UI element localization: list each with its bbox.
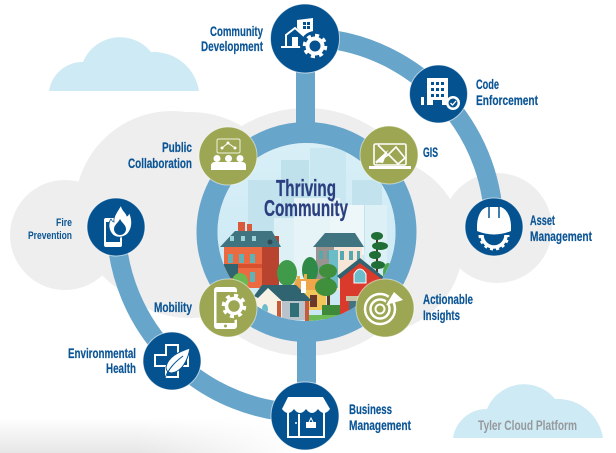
label: Community Development: Development bbox=[201, 39, 263, 54]
central ring bbox=[207, 132, 406, 332]
connector: lower left arc bbox=[116, 227, 305, 413]
label: Public Collaboration: Public bbox=[162, 140, 192, 155]
label: Fire Prevention: Prevention bbox=[28, 230, 72, 242]
node: GIS bbox=[360, 126, 418, 184]
node: Code Enforcement bbox=[410, 65, 468, 123]
label: Public Collaboration: Collaboration bbox=[128, 156, 192, 171]
title: Thriving bbox=[276, 175, 336, 201]
icon: audience and screen bbox=[211, 139, 246, 170]
label: Fire Prevention bbox=[28, 217, 72, 242]
cloud: large gray background bbox=[10, 108, 552, 356]
label: Actionable Insights bbox=[423, 292, 473, 323]
icon: hard hat and gear bbox=[477, 207, 511, 249]
skyline bbox=[248, 148, 387, 288]
connector: vertical stems bbox=[296, 60, 316, 395]
bottom shadow fade bbox=[0, 418, 300, 453]
icon: storefront bbox=[282, 397, 330, 437]
connector: upper right arc bbox=[335, 40, 494, 227]
cloud: Tyler Cloud Platform bbox=[453, 384, 603, 438]
label: Environmental Health: Environmental bbox=[68, 346, 136, 361]
label: Environmental Health bbox=[68, 346, 136, 376]
node: Business Management bbox=[271, 382, 339, 450]
title: Community bbox=[264, 195, 348, 221]
house: tudor front bbox=[254, 281, 338, 321]
node: Environmental Health bbox=[143, 332, 201, 390]
icon: phone with gear bbox=[214, 287, 248, 329]
node: Community Development bbox=[270, 4, 340, 73]
node: Fire Prevention bbox=[87, 198, 145, 256]
trees bbox=[232, 232, 390, 286]
house: back right bbox=[313, 233, 364, 292]
label: Actionable Insights: Insights bbox=[423, 308, 460, 323]
label: Community Development: Community bbox=[210, 24, 263, 39]
label: Business Management: Business bbox=[349, 402, 392, 417]
icon: phone and flame bbox=[104, 205, 132, 247]
icon: house, building and gear bbox=[281, 18, 330, 61]
node: Public Collaboration bbox=[199, 127, 257, 185]
label: Fire Prevention: Fire bbox=[56, 217, 72, 229]
title bbox=[264, 175, 348, 221]
central city scene bbox=[217, 143, 396, 323]
label: Actionable Insights: Actionable bbox=[423, 292, 473, 307]
label: Public Collaboration bbox=[128, 140, 192, 171]
node: Actionable Insights bbox=[356, 279, 414, 337]
label: Code Enforcement: Enforcement bbox=[476, 93, 538, 108]
label: Mobility: Mobility bbox=[154, 300, 192, 315]
cloud: top-left light blue bbox=[49, 37, 199, 91]
label: Asset Management bbox=[530, 213, 592, 244]
label: Code Enforcement bbox=[476, 77, 538, 108]
tree: middle bbox=[315, 264, 344, 319]
label: Business Management: Management bbox=[349, 418, 411, 433]
house: red right bbox=[337, 258, 384, 314]
label: Community Development bbox=[201, 24, 263, 54]
node: Mobility bbox=[199, 279, 257, 337]
node: Asset Management bbox=[465, 198, 523, 256]
icon: medical cross and leaf bbox=[155, 345, 190, 378]
icon: map on monitor bbox=[369, 144, 411, 169]
label: Code Enforcement: Code bbox=[476, 77, 499, 92]
label: Asset Management: Asset bbox=[530, 213, 555, 228]
icon: building with badge bbox=[421, 78, 460, 110]
label: Asset Management: Management bbox=[530, 229, 592, 244]
label: Business Management bbox=[349, 402, 411, 433]
house: orange middle bbox=[294, 274, 326, 310]
label: Environmental Health: Health bbox=[106, 361, 136, 376]
label: GIS: GIS bbox=[423, 145, 438, 160]
icon: radar target bbox=[365, 291, 404, 324]
house: brick left bbox=[220, 222, 281, 288]
cloud: Tyler Cloud Platform: Tyler Cloud Platform bbox=[478, 418, 577, 433]
